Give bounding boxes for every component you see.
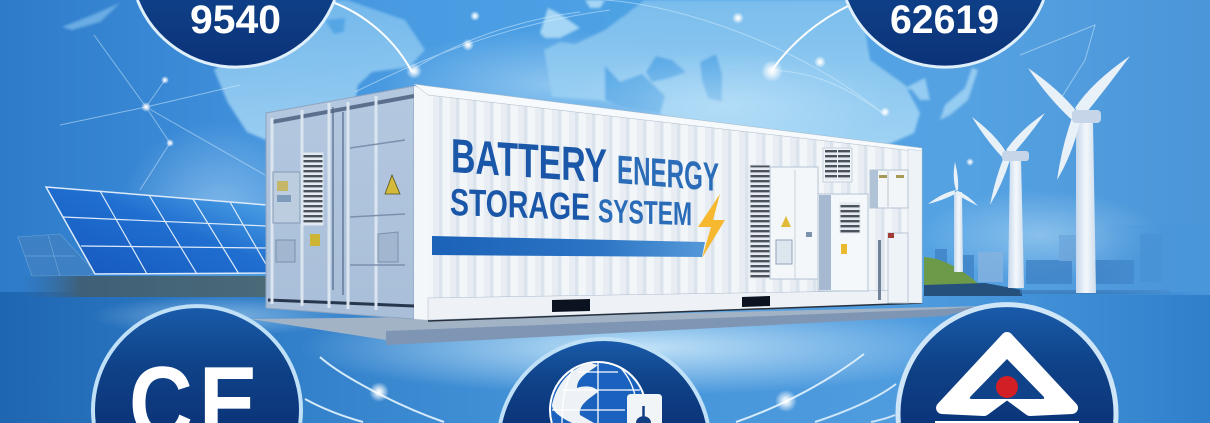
skyline right haze: [1100, 225, 1210, 295]
container long side: [428, 91, 920, 300]
badge: standard 9540: [137, 0, 335, 67]
electrical cabinet: [770, 167, 818, 279]
badge: CE mark: [93, 306, 301, 423]
distant city skyline: [935, 234, 1163, 284]
badge: global standard: [500, 339, 708, 423]
container corner post: [414, 86, 428, 320]
side vent: [750, 165, 770, 278]
solar field ground: [18, 276, 268, 297]
badge: BIS triangle mark: [898, 305, 1116, 423]
forklift pockets: [552, 296, 770, 312]
warning sign: lower door: [310, 234, 320, 246]
lower connector arcs: [305, 354, 896, 422]
control box: [273, 172, 300, 223]
network lines: [60, 0, 1095, 190]
triangle inner cutout: [970, 359, 1044, 399]
lower right unit: [878, 233, 908, 303]
triangle logo: [942, 338, 1072, 410]
sparkle points: [141, 11, 974, 166]
red dot: [996, 376, 1018, 398]
wind turbine: medium: [972, 113, 1045, 288]
container title: [450, 130, 719, 232]
container door face: [266, 86, 414, 319]
container title: ENERGY: [617, 148, 719, 200]
container title: STORAGE: [450, 182, 590, 229]
light haze over land: [560, 50, 890, 160]
upper right box: [870, 170, 908, 208]
ground plane: [0, 292, 1210, 423]
container title: BATTERY: [451, 130, 607, 194]
wind turbine: large: [1028, 56, 1130, 293]
globe icon: [550, 362, 646, 423]
CE letters: [125, 360, 265, 423]
badge: standard 62619: [846, 0, 1044, 67]
battery container: [266, 84, 922, 321]
North America: [214, 0, 425, 140]
world map: [62, 0, 978, 170]
bottom frame: [428, 290, 922, 320]
upper vent: [823, 148, 852, 182]
second cabinet: [818, 194, 868, 291]
Alaska: [62, 3, 120, 30]
logo base bar: [935, 421, 1079, 423]
plug card icon: [627, 394, 662, 423]
container title: SYSTEM: [598, 192, 692, 232]
main solar panel: [46, 187, 267, 274]
connector arcs from top badges: [332, 2, 850, 82]
door vent: [303, 153, 323, 225]
warning sign: door: [385, 175, 400, 194]
lightning bolt: [698, 194, 725, 258]
green shoreline: [924, 257, 1170, 296]
UK and Scandinavia: [540, 0, 605, 38]
rear solar panel: [18, 234, 95, 276]
wind turbine: small: [928, 162, 978, 272]
right end post: [908, 149, 922, 303]
Eurasia: [544, 0, 920, 170]
inland seas: [325, 0, 722, 114]
concrete platform: [251, 306, 985, 345]
blue stripe: [432, 236, 705, 257]
Japan and Korea: [905, 68, 978, 120]
solar panel array: [18, 187, 268, 297]
top rail: [414, 84, 922, 152]
